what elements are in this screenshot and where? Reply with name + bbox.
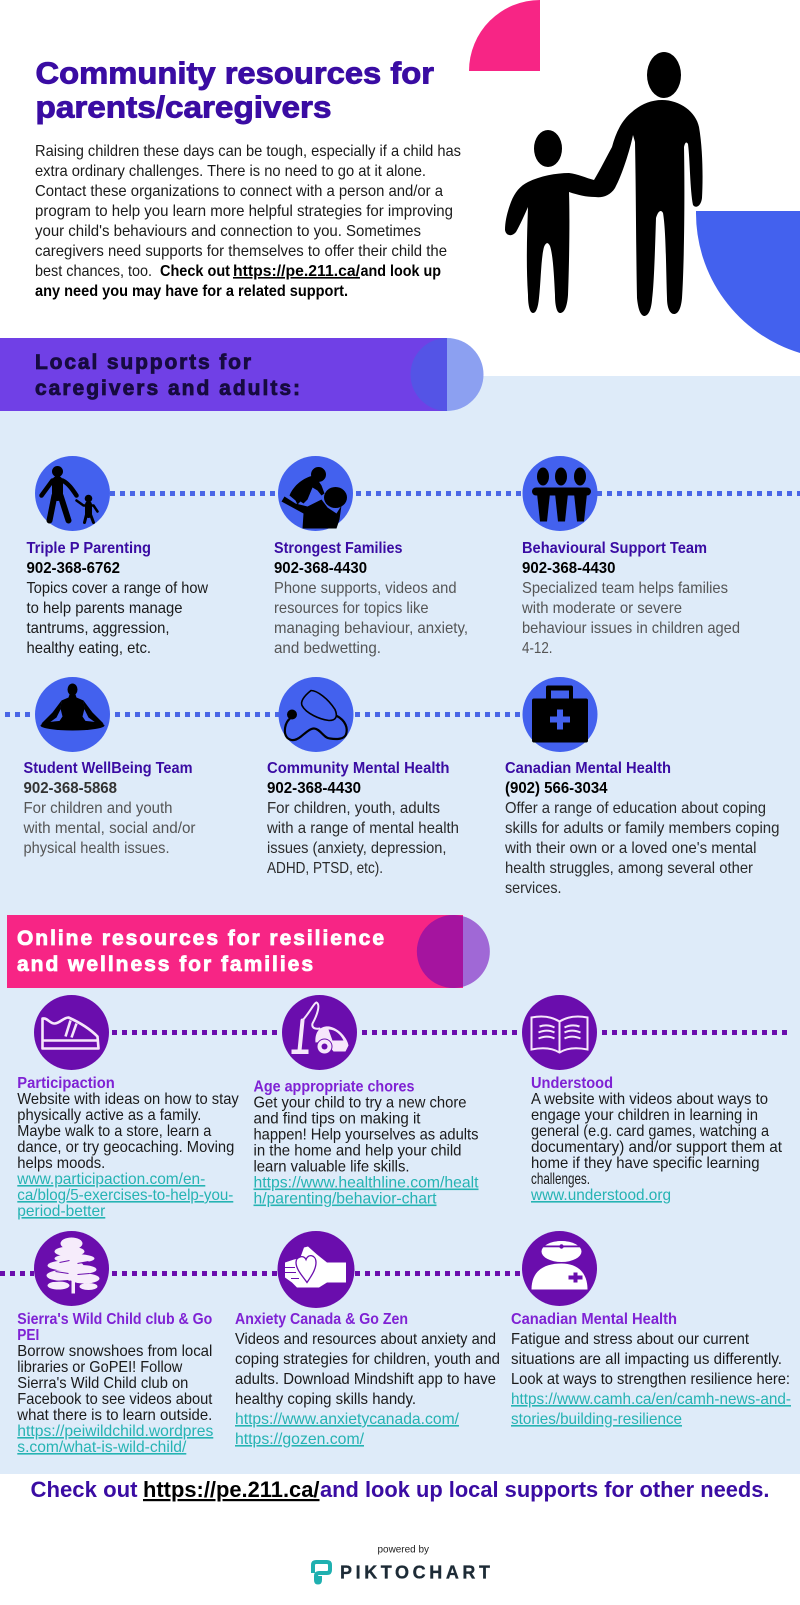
icon: vacuum cleaner (282, 995, 357, 1070)
text block: Triple P Parenting: tantrums, aggression, (26, 620, 170, 637)
icon: open book (522, 995, 597, 1070)
text block: Behavioural Support Team: behaviour issues in children aged (522, 620, 740, 637)
text block: Canadian Mental Health resilience (511, 1311, 791, 1428)
text block: Canadian Mental Health: skills for adults or family members coping (505, 820, 780, 837)
text block: Student WellBeing Team: with mental, social and/or (23, 820, 196, 837)
banner: online resources (7, 915, 490, 988)
text block: Strongest Families: Phone supports, videos and (274, 580, 456, 597)
text block: Understood: Understood (531, 1075, 613, 1092)
text block: Community Mental Health: For children, youth, adults (267, 800, 440, 817)
icon: Participaction shoe (34, 995, 109, 1070)
text block: Age appropriate chores: happen! Help yourselves as adults (254, 1126, 478, 1144)
icon: adult and child holding hands (505, 52, 703, 316)
banner: local supports (0, 338, 484, 411)
intro paragraph: Check out (160, 263, 231, 280)
intro paragraph: your child's behaviours and connection to you. Sometimes (35, 223, 421, 240)
text block: Participaction: physically active as a family. (17, 1107, 201, 1124)
text block: Student WellBeing Team: For children and youth (24, 800, 172, 817)
dotted connector lines: local supports (5, 494, 800, 714)
text block: Anxiety Canada & Go Zen: adults. Download Mindshift app to have (235, 1371, 496, 1388)
text block: Canadian Mental Health: (902) 566-3034 (505, 780, 608, 797)
text block: Sierra's Wild Child club: https://peiwildchild.wordpres (17, 1423, 213, 1440)
text block: Understood: general (e.g. card games, watching a (531, 1123, 769, 1140)
title (36, 56, 434, 124)
text block: Community Mental Health: Community Mental Health (267, 760, 450, 777)
text block: Sierra's Wild Child club: PEI (17, 1327, 39, 1344)
text block: Behavioural Support Team: Specialized team helps families (522, 580, 728, 597)
text block: Student WellBeing Team (23, 760, 196, 857)
icon: Canadian Mental Health first aid kit (522, 677, 598, 752)
text block: Age appropriate chores: Age appropriate chores (254, 1078, 415, 1096)
text block: Behavioural Support Team: 4-12. (522, 640, 552, 657)
text block: Age appropriate chores (254, 1078, 479, 1208)
text block: Student WellBeing Team: physical health issues. (24, 840, 170, 857)
intro paragraph: and look up (360, 263, 441, 280)
text block: Triple P Parenting: Triple P Parenting (26, 540, 151, 557)
Piktochart logo: PIKTOCHART (340, 1563, 490, 1583)
text block: Age appropriate chores: https://www.healthline.com/healt (254, 1174, 479, 1192)
text block: Age appropriate chores: h/parenting/behavior-chart (254, 1190, 437, 1208)
text block: Strongest Families: Strongest Families (274, 540, 403, 557)
text block: Canadian Mental Health resilience: situations are all impacting us differently. (511, 1351, 782, 1368)
title: Community resources for (36, 56, 434, 90)
text block: Understood: A website with videos about ways to (531, 1091, 768, 1108)
text block: Behavioural Support Team (521, 540, 740, 657)
text block: Community Mental Health (266, 760, 459, 877)
text block: Triple P Parenting: 902-368-6762 (26, 560, 120, 577)
text block: Understood: engage your children in learning in (531, 1107, 758, 1124)
icon: Community Mental Health stethoscope (278, 677, 354, 752)
text block: Strongest Families: and bedwetting. (274, 640, 381, 657)
text block: Anxiety Canada & Go Zen (235, 1311, 500, 1448)
text block: Canadian Mental Health resilience: Fatigue and stress about our current (511, 1331, 750, 1348)
decorative pink quarter circle (469, 0, 540, 71)
text block: Strongest Families: managing behaviour, anxiety, (274, 620, 468, 637)
text block: Canadian Mental Health resilience: stories/building-resilience (511, 1411, 682, 1428)
text block: Strongest Families: 902-368-4430 (274, 560, 367, 577)
text block: Understood: home if they have specific learning (531, 1155, 760, 1172)
title: parents/caregivers (36, 90, 332, 124)
intro paragraph: caregivers need supports for themselves to offer their child the (35, 243, 447, 260)
text block: Sierra's Wild Child club: Sierra's Wild Child club on (17, 1375, 188, 1392)
text block: Canadian Mental Health resilience: https://www.camh.ca/en/camh-news-and- (511, 1391, 791, 1408)
intro paragraph: https://pe.211.ca/ (233, 263, 361, 280)
text block: Canadian Mental Health: services. (505, 880, 562, 897)
intro paragraph (35, 143, 461, 300)
text block: Participaction: dance, or try geocaching. Moving (17, 1139, 234, 1156)
text block: Triple P Parenting: healthy eating, etc. (26, 640, 151, 657)
text block: Anxiety Canada & Go Zen: coping strategies for children, youth and (235, 1351, 500, 1368)
text block: Age appropriate chores: in the home and help your child (254, 1142, 462, 1160)
text block: Canadian Mental Health: health struggles, among several other (505, 860, 754, 877)
text block: Triple P Parenting (26, 540, 208, 657)
icon: Student WellBeing meditation figure (35, 677, 110, 752)
text block: Participaction: Maybe walk to a store, learn a (17, 1123, 211, 1140)
text block: Age appropriate chores: learn valuable life skills. (254, 1158, 410, 1176)
banner: online resources: and wellness for families (17, 953, 313, 976)
text block: Anxiety Canada & Go Zen: https://gozen.com/ (235, 1431, 365, 1448)
text block: Understood (530, 1075, 783, 1204)
icon: Strongest Families parent lifting baby (278, 456, 353, 531)
banner: online resources: Online resources for resilience (17, 927, 384, 950)
text block: Age appropriate chores: Get your child to try a new chore (254, 1094, 467, 1112)
text block: Sierra's Wild Child club: Borrow snowshoes from local (17, 1343, 212, 1360)
footer call to action (30, 1477, 770, 1502)
text block: Behavioural Support Team: with moderate or severe (521, 600, 682, 617)
text block: Sierra's Wild Child club: Facebook to see videos about (17, 1391, 213, 1408)
icon: tree (34, 1231, 109, 1306)
text block: Canadian Mental Health resilience: Canadian Mental Health (511, 1311, 677, 1328)
text block: Canadian Mental Health: with their own or a loved one's mental (504, 840, 756, 857)
dotted connector lines: online resources (0, 1032, 788, 1274)
footer call to action: https://pe.211.ca/ (143, 1477, 320, 1502)
text block: Anxiety Canada & Go Zen: https://www.anxietycanada.com/ (235, 1411, 460, 1428)
text block: Anxiety Canada & Go Zen: Anxiety Canada & Go Zen (235, 1311, 408, 1328)
footer call to action: Check out (30, 1477, 138, 1502)
icon: hand with heart (278, 1231, 354, 1308)
text block: Community Mental Health: with a range of mental health (266, 820, 459, 837)
text block: Participaction: helps moods. (17, 1155, 105, 1172)
text block: Behavioural Support Team: 902-368-4430 (522, 560, 616, 577)
text block: Participaction: Participaction (17, 1075, 115, 1092)
intro paragraph: Raising children these days can be tough, especially if a child has (35, 143, 461, 160)
text block: Triple P Parenting: to help parents manage (26, 600, 183, 617)
text block: Sierra's Wild Child club: s.com/what-is-wild-child/ (17, 1439, 187, 1456)
intro paragraph: any need you may have for a related support. (35, 283, 348, 300)
light blue content panel (0, 376, 800, 1474)
text block: Sierra's Wild Child club: Sierra's Wild Child club & Go (17, 1311, 213, 1328)
text block: Understood: challenges. (531, 1171, 590, 1188)
banner: local supports: caregivers and adults: (35, 377, 300, 400)
text block: Understood: documentary) and/or support them at (531, 1139, 783, 1156)
text block: Participaction: www.participaction.com/en- (16, 1171, 205, 1188)
intro paragraph: Contact these organizations to connect with a person and/or a (35, 183, 443, 200)
text block: Participaction (16, 1075, 239, 1220)
text block: Community Mental Health: issues (anxiety, depression, (267, 840, 446, 857)
text block: Participaction: Website with ideas on how to stay (17, 1091, 239, 1108)
intro paragraph: program to help you learn more helpful strategies for improving (35, 203, 453, 220)
text block: Community Mental Health: 902-368-4430 (267, 780, 361, 797)
text block: Sierra's Wild Child club: libraries or GoPEI! Follow (17, 1359, 183, 1376)
text block: Participaction: ca/blog/5-exercises-to-help-you- (17, 1187, 233, 1204)
icon: Behavioural Support Team three figures (522, 456, 598, 531)
text block: Student WellBeing Team: 902-368-5868 (24, 780, 117, 797)
text block: Sierra's Wild Child club: what there is to learn outside. (16, 1407, 212, 1424)
text block: Age appropriate chores: and find tips on making it (254, 1110, 421, 1128)
text block: Student WellBeing Team: Student WellBeing Team (24, 760, 192, 777)
text block: Strongest Families (274, 540, 468, 657)
text block: Community Mental Health: ADHD, PTSD, etc). (267, 860, 383, 877)
text block: Understood: www.understood.org (530, 1187, 671, 1204)
text block: Participaction: period-better (17, 1203, 106, 1220)
text block: Anxiety Canada & Go Zen: Videos and resources about anxiety and (235, 1331, 496, 1348)
icon: nurse (522, 1231, 597, 1306)
text block: Triple P Parenting: Topics cover a range of how (26, 580, 208, 597)
intro paragraph: extra ordinary challenges. There is no need to go at it alone. (35, 163, 426, 180)
text block: Behavioural Support Team: Behavioural Support Team (522, 540, 707, 557)
text block: Anxiety Canada & Go Zen: healthy coping skills handy. (235, 1391, 416, 1408)
text block: Strongest Families: resources for topics like (274, 600, 429, 617)
text block: Canadian Mental Health: Offer a range of education about coping (505, 800, 766, 817)
intro paragraph: best chances, too. (35, 263, 152, 280)
banner: local supports: Local supports for (35, 351, 251, 374)
decorative blue quarter circle (696, 211, 800, 353)
icon: Triple P parent and child (35, 456, 110, 531)
footer call to action: and look up local supports for other needs. (320, 1477, 770, 1502)
text block: Canadian Mental Health (504, 760, 780, 897)
powered by caption: powered by (378, 1544, 429, 1556)
text block: Canadian Mental Health: Canadian Mental Health (505, 760, 671, 777)
text block: Sierra's Wild Child club (16, 1311, 213, 1456)
